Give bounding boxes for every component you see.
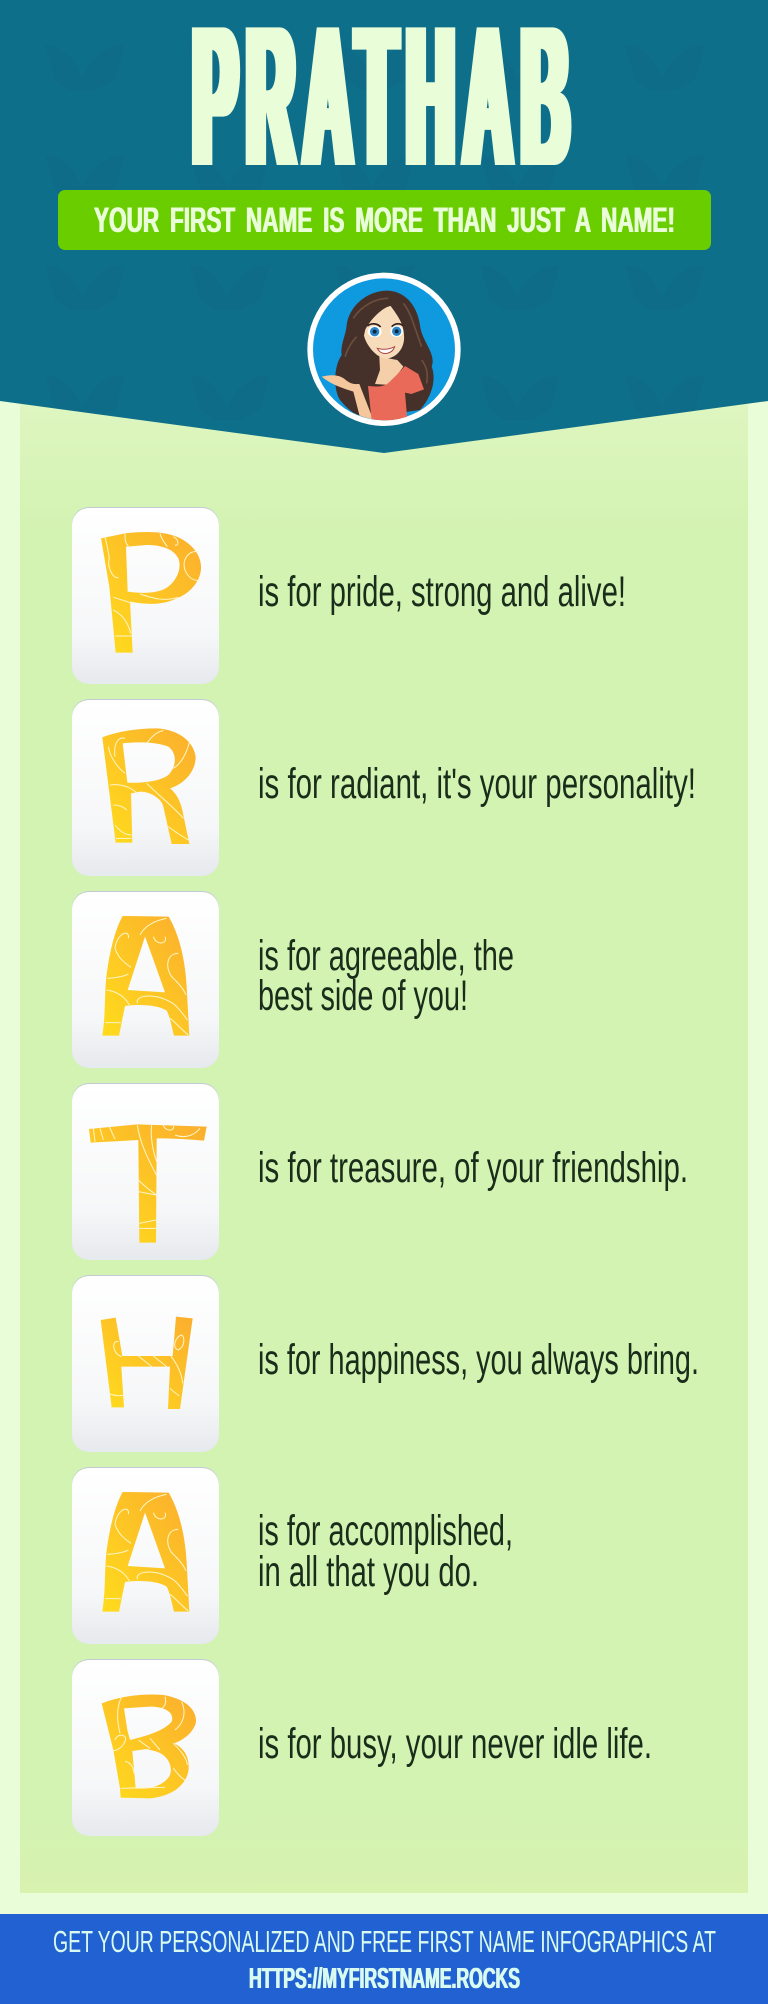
row: letter B	[72, 1659, 219, 1836]
text: A agreeable: best side of you!	[258, 972, 468, 1020]
card shadow	[72, 507, 219, 683]
card	[72, 508, 219, 684]
panel: content background	[20, 380, 748, 1893]
text: A accomplished: is for accomplished,	[258, 1507, 513, 1555]
letter T	[89, 1124, 207, 1243]
card	[72, 1468, 219, 1644]
text: A accomplished: in all that you do.	[258, 1548, 479, 1596]
letter B	[102, 1695, 196, 1798]
card shadow	[72, 1467, 219, 1643]
card shadow	[72, 699, 219, 875]
row: letter P	[72, 507, 219, 684]
letter H	[101, 1317, 193, 1409]
text: A agreeable: is for agreeable, the	[258, 932, 514, 980]
row: letter A	[72, 891, 219, 1068]
text: A accomplished	[258, 1507, 513, 1596]
icon: avatar	[307, 273, 461, 426]
card shadow	[72, 891, 219, 1067]
card	[72, 700, 219, 876]
footer line 2: HTTPS://MYFIRSTNAME.ROCKS	[249, 1963, 520, 1995]
footer	[0, 1914, 768, 2004]
card shadow	[72, 1275, 219, 1451]
letter P	[101, 532, 201, 653]
card	[72, 892, 219, 1068]
letter R	[102, 728, 196, 844]
row: letter H	[72, 1275, 219, 1452]
card	[72, 1276, 219, 1452]
header chevron	[0, 0, 768, 453]
card shadow	[72, 1083, 219, 1259]
card shadow	[72, 1659, 219, 1835]
letter A	[102, 916, 189, 1036]
row: letter A (second)	[72, 1467, 219, 1644]
card	[72, 1660, 219, 1836]
row: letter R	[72, 699, 219, 876]
card	[72, 1084, 219, 1260]
banner	[58, 190, 711, 250]
row: letter T	[72, 1083, 219, 1260]
letter A	[102, 1492, 189, 1612]
text: A agreeable	[258, 932, 514, 1020]
